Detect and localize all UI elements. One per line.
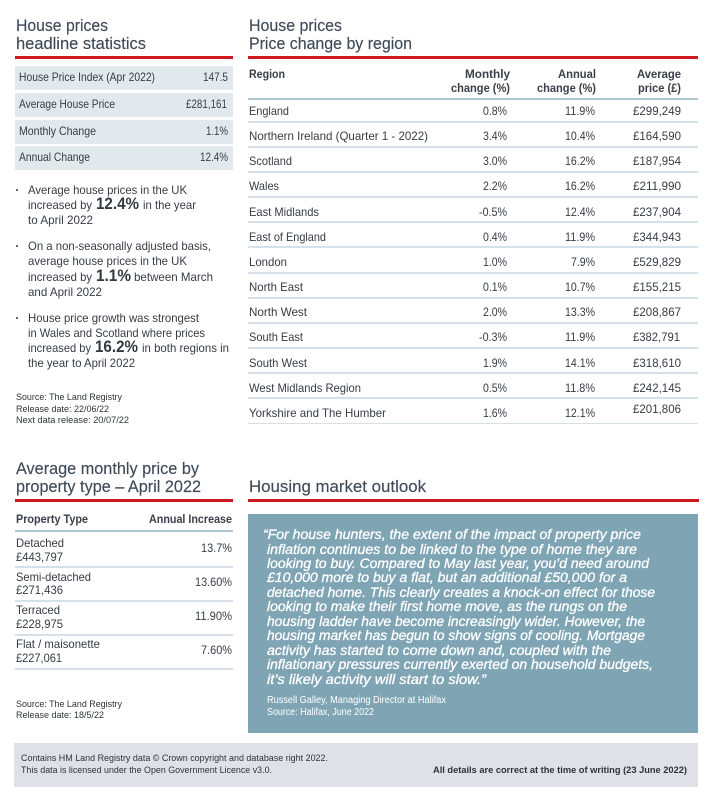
table row: North West: North West xyxy=(249,305,308,319)
table row: London: 7.9% xyxy=(571,255,595,269)
table row: South West: 14.1% xyxy=(565,356,595,370)
source note: headline statistics: Release date: 22/06/22 xyxy=(16,404,109,415)
source note: headline statistics: Next data release: 20/07/22 xyxy=(16,415,129,426)
panel: housing market outlook xyxy=(248,477,699,733)
heading: housing market outlook xyxy=(248,477,699,502)
table row: North East: £155,215 xyxy=(633,280,681,294)
bullet: strongest growth: House price growth was strongest xyxy=(28,311,200,325)
table header xyxy=(248,67,698,100)
table row: England: England xyxy=(249,104,289,118)
quote attribution xyxy=(267,695,446,718)
heading: average monthly price by property type xyxy=(15,459,233,502)
table row: England: 0.8% xyxy=(483,104,507,118)
quote text: it’s likely activity will start to slow.” xyxy=(267,672,488,687)
footer panel xyxy=(14,743,698,787)
table header: change (%) xyxy=(451,81,510,95)
stat row: monthly change: Monthly Change xyxy=(19,124,96,138)
table row: England xyxy=(248,104,698,123)
quote text xyxy=(263,527,655,687)
table row: East Midlands: 12.4% xyxy=(565,205,595,219)
property table header: Property Type xyxy=(16,512,88,526)
table row: North West: £208,867 xyxy=(633,305,681,319)
property row: flat / maisonette: Flat / maisonette xyxy=(16,637,100,651)
property table header: Annual Increase xyxy=(149,512,232,526)
table row: South East: £382,791 xyxy=(633,330,680,344)
heading: housing market outlook: Housing market outlook xyxy=(249,477,426,496)
table row: West Midlands Region: 11.8% xyxy=(565,381,595,395)
table row: Wales: 2.2% xyxy=(483,179,507,193)
source note: property type: Source: The Land Registry xyxy=(16,699,122,710)
property row: semi-detached: Semi-detached xyxy=(16,570,91,584)
bullet: monthly increase: between March xyxy=(134,270,213,284)
bullet: annual increase: 12.4% xyxy=(96,195,139,213)
quote text: housing ladder have become increasingly wider. However, the xyxy=(267,614,645,629)
stat row: annual change: Annual Change xyxy=(19,150,90,164)
stat row: monthly change: 1.1% xyxy=(206,124,228,138)
heading: house prices headline statistics: House prices xyxy=(16,16,108,35)
heading: price change by region: Price change by region xyxy=(249,34,412,53)
table row: West Midlands Region: £242,145 xyxy=(633,381,681,395)
table row: North East: 10.7% xyxy=(565,280,595,294)
table row: Northern Ireland: £164,590 xyxy=(633,129,681,143)
table row: East of England: 0.4% xyxy=(483,230,507,244)
stat row: house price index xyxy=(15,66,233,90)
bullet: monthly increase: 1.1% xyxy=(96,267,131,285)
table row: Wales: Wales xyxy=(249,179,279,193)
table row: England: 11.9% xyxy=(565,104,595,118)
table row: East of England: £344,943 xyxy=(633,230,681,244)
table row: West Midlands Region: 0.5% xyxy=(483,381,507,395)
quote text: detached home. This clearly creates a knock-on effect for those xyxy=(267,585,655,600)
table row: London: 1.0% xyxy=(483,255,507,269)
quote text: inflationary pressures currently exerted on household budgets, xyxy=(267,657,653,672)
quote text: “For house hunters, the extent of the impact of property price xyxy=(263,527,641,542)
bullet: monthly increase: increased by xyxy=(28,270,92,284)
table row: North East: 0.1% xyxy=(483,280,507,294)
table row: Yorkshire and The Humber: Yorkshire and The Humber xyxy=(249,406,386,420)
table header: price (£) xyxy=(638,81,681,95)
table row: Northern Ireland: Northern Ireland (Quarter 1 - 2022) xyxy=(249,129,428,143)
table row: London: London xyxy=(249,255,287,269)
table row: West Midlands Region: West Midlands Region xyxy=(249,381,361,395)
bullet: strongest growth: the year to April 2022 xyxy=(28,356,135,370)
footer licence text xyxy=(21,753,328,776)
table row: Northern Ireland: 10.4% xyxy=(565,129,595,143)
quote attribution: Source: Halifax, June 2022 xyxy=(267,707,374,718)
table header: Monthly xyxy=(465,67,510,81)
stat row: house price index: 147.5 xyxy=(203,70,228,84)
table row: Northern Ireland xyxy=(248,129,698,148)
table header: Region xyxy=(249,67,285,81)
stat row: annual change: 12.4% xyxy=(200,150,228,164)
property row: terraced: Terraced xyxy=(16,603,60,617)
heading: house prices headline statistics xyxy=(15,16,233,59)
table row: Northern Ireland: 3.4% xyxy=(483,129,507,143)
heading: price change by region xyxy=(248,16,698,59)
table row: North West xyxy=(248,305,698,324)
table header: Annual xyxy=(558,67,596,81)
property row: detached xyxy=(15,536,233,568)
bullet: annual increase: Average house prices in the UK xyxy=(28,183,187,197)
table row: East Midlands: -0.5% xyxy=(479,205,507,219)
quote attribution: Russell Galley, Managing Director at Halifax xyxy=(267,695,446,706)
stat row: average house price: Average House Price xyxy=(19,97,115,111)
table row: London: £529,829 xyxy=(633,255,681,269)
table row: London xyxy=(248,255,698,274)
table row: South West: £318,610 xyxy=(633,356,681,370)
panel: price change by region xyxy=(248,16,698,424)
bullet: annual increase: to April 2022 xyxy=(28,213,93,227)
stat row: average house price xyxy=(15,93,233,117)
quote text: inflation continues to be linked to the type of home they are xyxy=(267,542,637,557)
table row: Scotland: Scotland xyxy=(249,154,292,168)
bullet: strongest growth: in both regions in xyxy=(142,341,229,355)
property row: semi-detached: £271,436 xyxy=(16,583,63,597)
property row: terraced xyxy=(15,603,233,636)
table row: Scotland: 3.0% xyxy=(483,154,507,168)
footer licence text: Contains HM Land Registry data © Crown copyright and database right 2022. xyxy=(21,753,328,764)
heading: average monthly price by property type: Average monthly price by xyxy=(16,459,199,478)
table row: Wales: 16.2% xyxy=(565,179,595,193)
table row: Yorkshire and The Humber: 12.1% xyxy=(565,406,595,420)
table header: change (%) xyxy=(537,81,596,95)
bullet: annual increase: increased by xyxy=(28,198,92,212)
quote text: £10,000 more to buy a flat, but an additional £50,000 for a xyxy=(266,570,627,585)
table row: England: £299,249 xyxy=(633,104,681,118)
table row: East of England: 11.9% xyxy=(565,230,595,244)
bullet: monthly increase: and April 2022 xyxy=(28,285,102,299)
quote text: housing market has begun to show signs of cooling. Mortgage xyxy=(267,628,645,643)
table row: North West: 2.0% xyxy=(483,305,507,319)
table row: North East xyxy=(248,280,698,299)
table header: Average xyxy=(637,67,681,81)
property row: terraced: £228,975 xyxy=(16,617,63,631)
source note: property type: Release date: 18/5/22 xyxy=(16,710,104,721)
stat row: house price index: House Price Index (Apr 2022) xyxy=(19,70,155,84)
stat row: monthly change xyxy=(15,120,233,144)
table row: South West: 1.9% xyxy=(483,356,507,370)
property row: flat / maisonette: 7.60% xyxy=(201,643,232,657)
property row: flat / maisonette xyxy=(15,637,233,670)
stat row: average house price: £281,161 xyxy=(186,97,227,111)
property row: flat / maisonette: £227,061 xyxy=(16,651,62,665)
table row: West Midlands Region xyxy=(248,381,698,399)
table row: East Midlands: £237,904 xyxy=(633,205,681,219)
table row: East Midlands: East Midlands xyxy=(249,205,319,219)
table row: Scotland: 16.2% xyxy=(565,154,595,168)
table row: South West xyxy=(248,356,698,374)
table row: South East: South East xyxy=(249,330,304,344)
property row: semi-detached: 13.60% xyxy=(195,575,232,589)
table row: East Midlands xyxy=(248,205,698,223)
heading: house prices headline statistics: headline statistics xyxy=(16,34,146,53)
table row: East of England: East of England xyxy=(249,230,326,244)
panel: price by property type xyxy=(15,459,233,721)
bullet: monthly increase xyxy=(16,239,213,299)
table row: North West: 13.3% xyxy=(565,305,595,319)
property row: detached: £443,797 xyxy=(16,550,63,564)
property row: detached: 13.7% xyxy=(201,541,232,555)
quote text: looking to buy. Compared to May last year, you’d need around xyxy=(267,556,649,571)
quote text: looking to make their first home move, as the rungs on the xyxy=(267,599,627,614)
bullet: strongest growth: increased by xyxy=(28,341,91,355)
table row: Wales: £211,990 xyxy=(633,179,681,193)
source note: property type xyxy=(16,699,122,721)
footer licence text: This data is licensed under the Open Government Licence v3.0. xyxy=(21,765,272,776)
bullet: strongest growth: 16.2% xyxy=(95,338,138,356)
bullet: monthly increase: average house prices in the UK xyxy=(28,254,187,268)
footer disclaimer: All details are correct at the time of writing (23 June 2022) xyxy=(433,765,687,776)
property table header xyxy=(15,512,233,532)
table row: South East: 11.9% xyxy=(565,330,595,344)
table row: South East: -0.3% xyxy=(479,330,507,344)
quote text: activity has started to come down and, coupled with the xyxy=(267,643,611,658)
property row: semi-detached xyxy=(15,570,233,602)
table row: East of England xyxy=(248,230,698,248)
table row: Yorkshire and The Humber: 1.6% xyxy=(483,406,507,420)
source note: headline statistics: Source: The Land Registry xyxy=(16,392,122,403)
bullet: strongest growth xyxy=(16,311,229,370)
table row: Yorkshire and The Humber: £201,806 xyxy=(633,402,681,416)
panel: headline statistics xyxy=(15,16,233,426)
bullet: annual increase xyxy=(16,183,196,227)
bullet: annual increase: in the year xyxy=(143,198,196,212)
table row: Wales xyxy=(248,179,698,198)
table row: Scotland xyxy=(248,154,698,173)
source note: headline statistics xyxy=(16,392,129,426)
heading: average monthly price by property type: property type – April 2022 xyxy=(16,477,201,496)
quote box background xyxy=(248,514,698,733)
table row: North East: North East xyxy=(249,280,304,294)
table row: South East xyxy=(248,330,698,349)
bullet: monthly increase: On a non-seasonally adjusted basis, xyxy=(28,239,211,253)
table row: South West: South West xyxy=(249,356,308,370)
table row: Yorkshire and The Humber xyxy=(248,402,698,424)
property row: terraced: 11.90% xyxy=(195,609,232,623)
heading: price change by region: House prices xyxy=(249,16,342,35)
stat row: annual change xyxy=(15,146,233,170)
property row: detached: Detached xyxy=(16,536,64,550)
bullet: strongest growth: in Wales and Scotland where prices xyxy=(28,326,205,340)
table row: Scotland: £187,954 xyxy=(633,154,681,168)
